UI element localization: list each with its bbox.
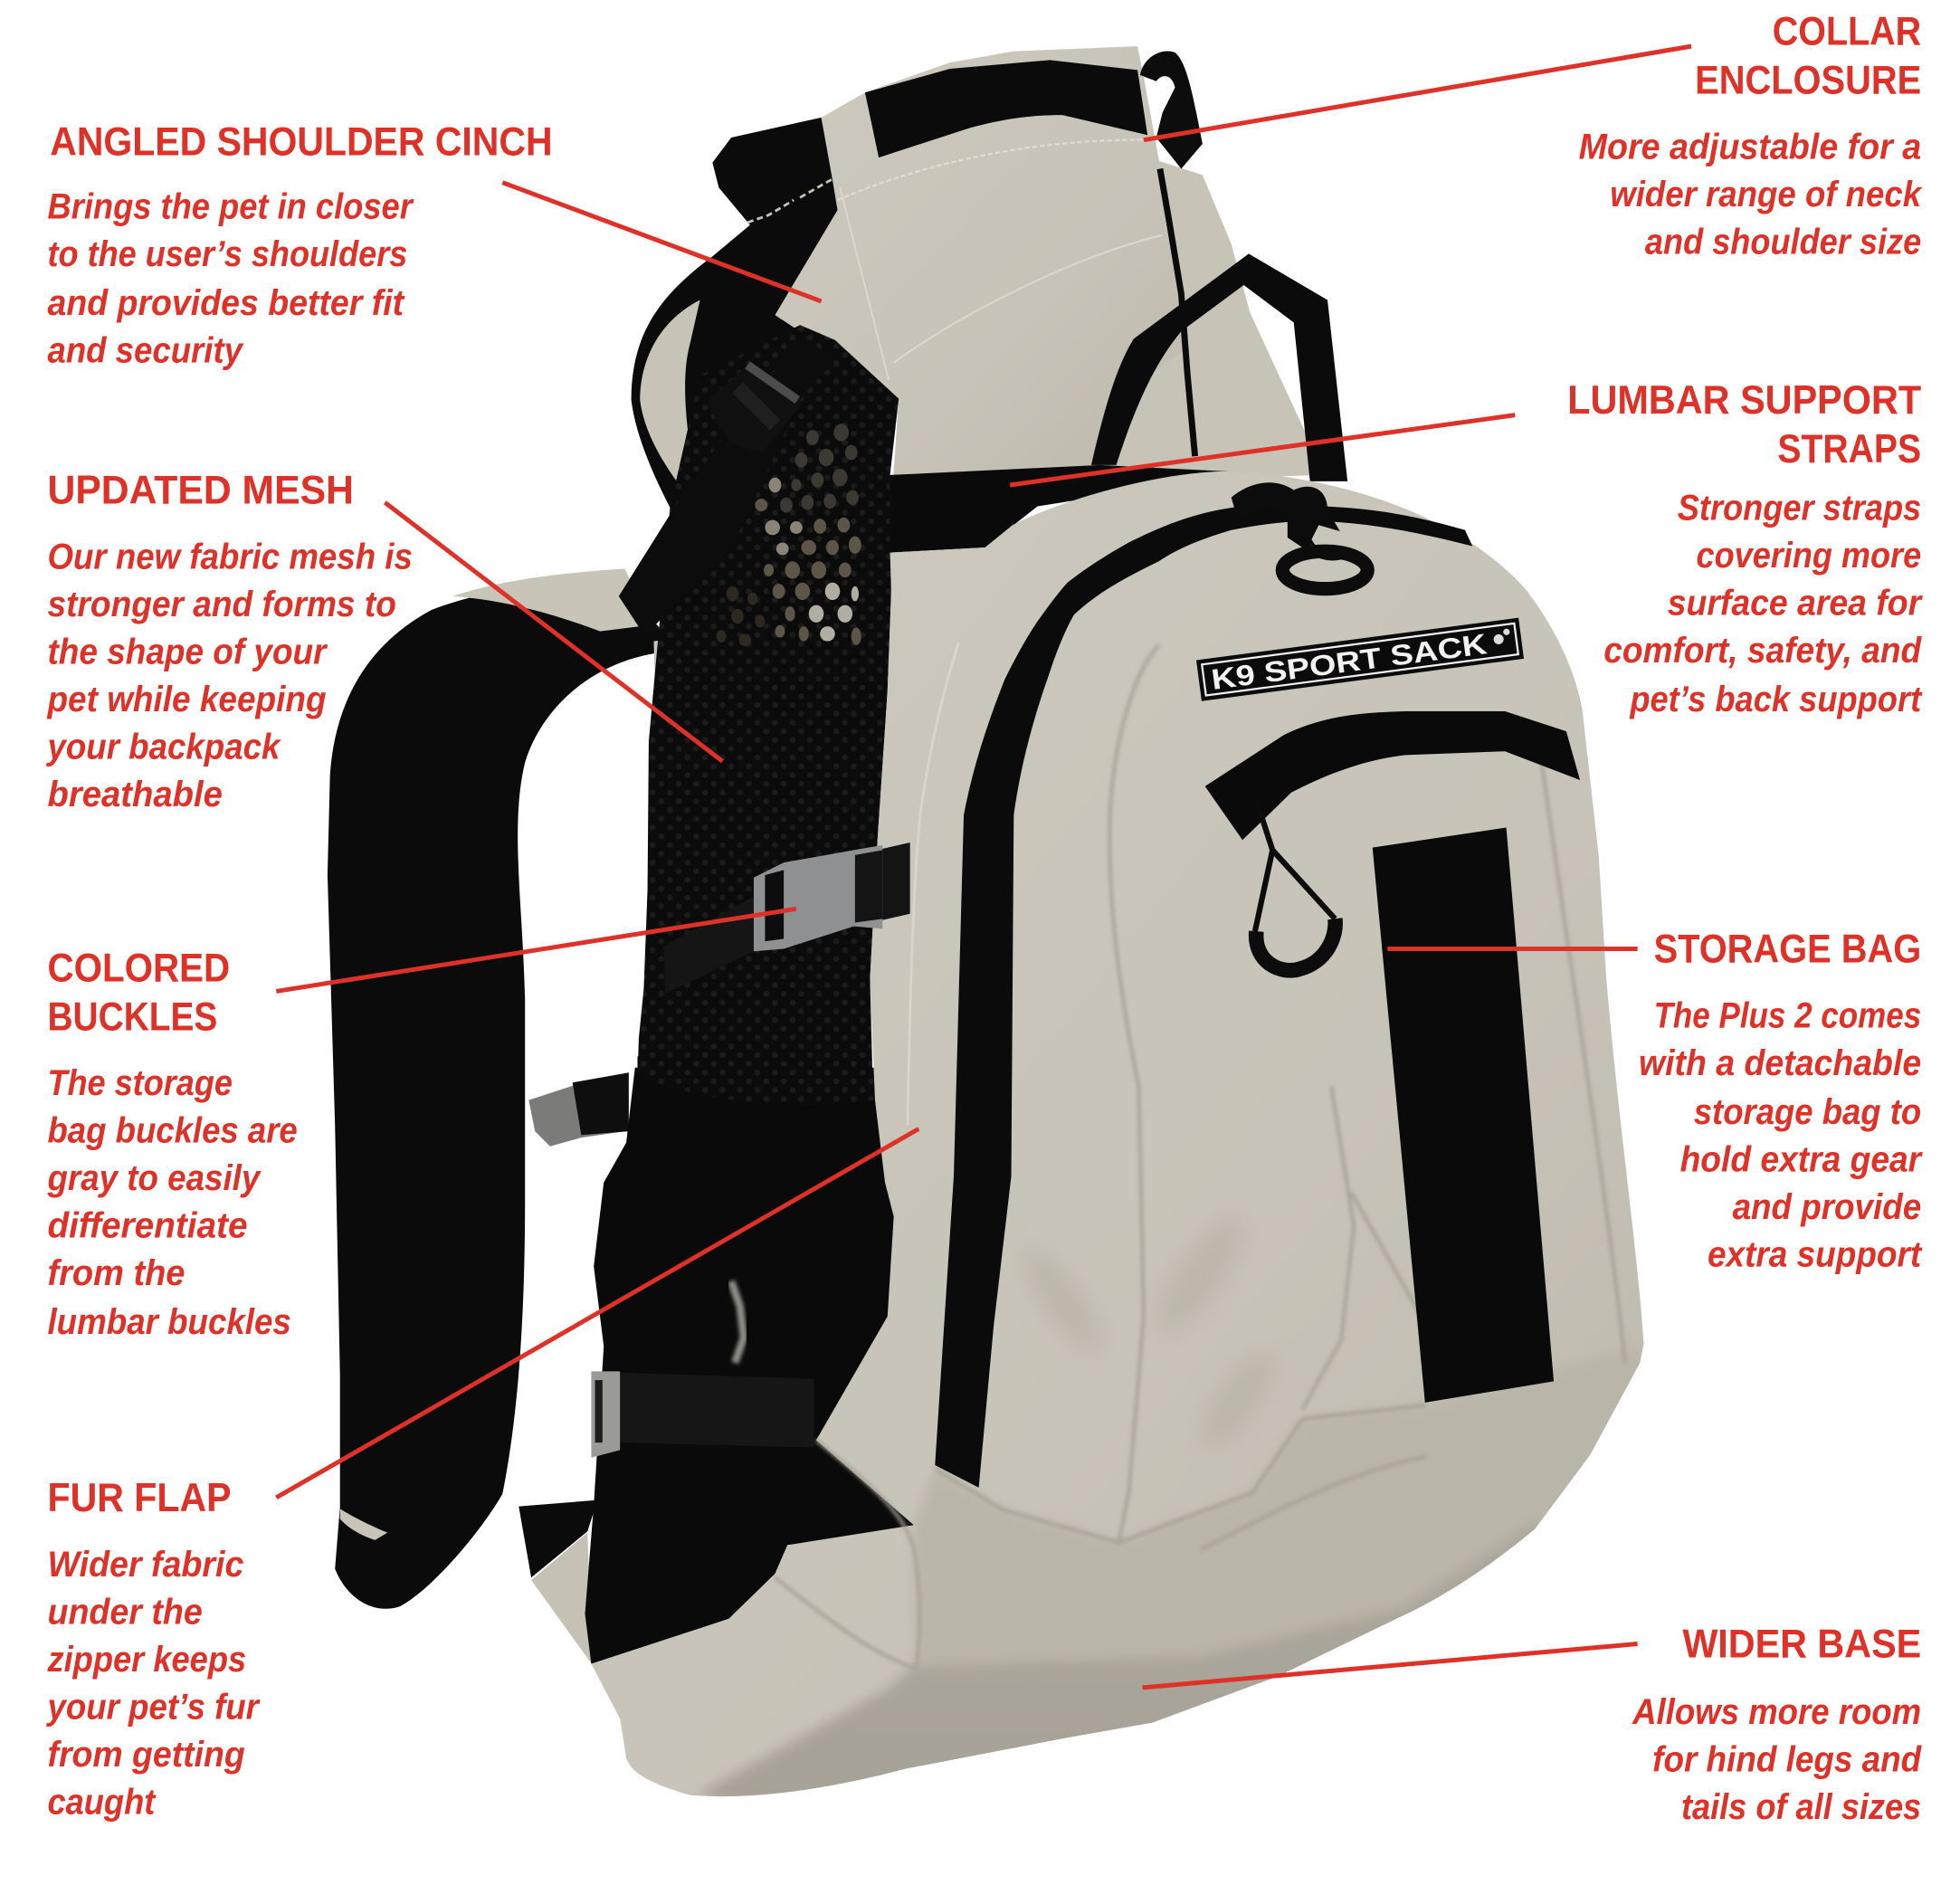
callout: colored buckles: BUCKLES (47, 993, 217, 1039)
callout: fur flap (46, 1474, 261, 1822)
lumbar strap (890, 465, 1250, 553)
callout: lumbar support straps: comfort, safety, and (1603, 631, 1923, 671)
callout: fur flap: under the (47, 1592, 203, 1632)
callout: updated mesh: breathable (47, 775, 223, 814)
mesh panel (636, 325, 899, 1121)
callout: angled shoulder cinch: Brings the pet in closer (47, 187, 414, 227)
carry handle (1091, 253, 1347, 481)
small pocket zipper (1205, 711, 1580, 840)
callout: collar enclosure: and shoulder size (1645, 222, 1921, 262)
callout: fur flap: FUR FLAP (47, 1474, 232, 1520)
logo patch: K9 SPORT SACK (1209, 627, 1489, 696)
callout: wider base: WIDER BASE (1682, 1621, 1921, 1667)
velcro strip (1373, 827, 1554, 1403)
top zipper pulls (1232, 482, 1367, 589)
main zipper (935, 505, 1472, 1488)
callout: storage bag: The Plus 2 comes (1654, 996, 1921, 1036)
callout: collar enclosure: wider range of neck (1610, 175, 1923, 214)
lower mesh pocket (585, 1056, 918, 1664)
callout: colored buckles: differentiate (47, 1206, 248, 1246)
callout: updated mesh (46, 467, 413, 814)
soft fabric blotches (1010, 1206, 1286, 1458)
fabric folds and seams (775, 645, 1625, 1669)
callout: colored buckles: gray to easily (47, 1158, 262, 1198)
callout: lumbar support straps: LUMBAR SUPPORT (1567, 376, 1921, 423)
callout: storage bag (1639, 926, 1923, 1274)
callout: wider base (1632, 1621, 1923, 1827)
callout: updated mesh: your backpack (46, 728, 281, 767)
callout: storage bag: extra support (1708, 1234, 1923, 1274)
callout: lumbar support straps: Stronger straps (1678, 489, 1921, 528)
callout: collar enclosure: COLLAR (1773, 8, 1921, 54)
callout: storage bag: hold extra gear (1680, 1139, 1923, 1179)
callout: angled shoulder cinch: to the user’s shoulders (47, 234, 407, 274)
dark collar and side fabric (632, 118, 862, 508)
callout: angled shoulder cinch (47, 118, 553, 371)
callout: wider base: Allows more room (1632, 1692, 1921, 1732)
backpack photo illustration (328, 46, 1650, 1809)
callout: storage bag: and provide (1733, 1187, 1921, 1227)
callout: collar enclosure: More adjustable for a (1579, 127, 1921, 167)
callout: lumbar support straps: covering more (1697, 536, 1921, 576)
zipper cord and pull (1255, 800, 1336, 970)
back shoulder strap (328, 569, 679, 1609)
callout: storage bag: with a detachable (1639, 1043, 1921, 1083)
neck panel beige (775, 46, 1185, 488)
callout: updated mesh: Our new fabric mesh is (47, 538, 413, 577)
side straps with gray buckle (664, 843, 910, 994)
callout: colored buckles (47, 944, 298, 1342)
callout: lumbar support straps: pet’s back support (1629, 680, 1923, 719)
callout: wider base: for hind legs and (1652, 1739, 1923, 1779)
callout: colored buckles: The storage (47, 1063, 233, 1103)
callout: storage bag: STORAGE BAG (1654, 926, 1921, 972)
callout: collar enclosure: ENCLOSURE (1695, 57, 1921, 103)
foot strap and beige tab (519, 1500, 597, 1665)
callout: colored buckles: COLORED (47, 944, 230, 990)
callout: storage bag: storage bag to (1694, 1092, 1921, 1132)
callout: angled shoulder cinch: and security (47, 331, 244, 371)
callout: lumbar support straps: STRAPS (1777, 425, 1921, 471)
callout: colored buckles: from the (47, 1253, 185, 1293)
callout: colored buckles: lumbar buckles (47, 1302, 291, 1342)
callout: collar enclosure (1579, 8, 1923, 262)
callout: colored buckles: bag buckles are (47, 1111, 298, 1151)
lower strap and buckle (591, 1371, 813, 1458)
lower base bands (696, 1345, 1650, 1809)
leader lines (276, 46, 1691, 1688)
main beige body (591, 471, 1644, 1796)
callout: updated mesh: stronger and forms to (47, 585, 396, 624)
side buckle at back (528, 1072, 629, 1147)
callout: fur flap: your pet’s fur (46, 1687, 261, 1727)
callout: fur flap: zipper keeps (47, 1640, 246, 1680)
callout: updated mesh: the shape of your (47, 633, 328, 672)
callout: angled shoulder cinch: and provides better fit (47, 283, 405, 323)
callout: lumbar support straps: surface area for (1668, 584, 1923, 624)
callout: lumbar support straps (1567, 376, 1923, 719)
callout: fur flap: caught (47, 1782, 157, 1822)
callout: updated mesh: pet while keeping (47, 680, 327, 719)
callout: fur flap: from getting (47, 1735, 245, 1775)
callout: updated mesh: UPDATED MESH (47, 467, 354, 513)
callout: fur flap: Wider fabric (47, 1545, 243, 1585)
shoulder cinch strap and slider (619, 338, 835, 636)
light side panel seam (908, 643, 959, 1125)
callout: angled shoulder cinch: ANGLED SHOULDER CINCH (50, 118, 553, 164)
logo patch (1196, 618, 1524, 701)
rear panel behind neck (1100, 160, 1325, 481)
neck black strap and ring (865, 51, 1203, 456)
callout: wider base: tails of all sizes (1681, 1787, 1921, 1827)
